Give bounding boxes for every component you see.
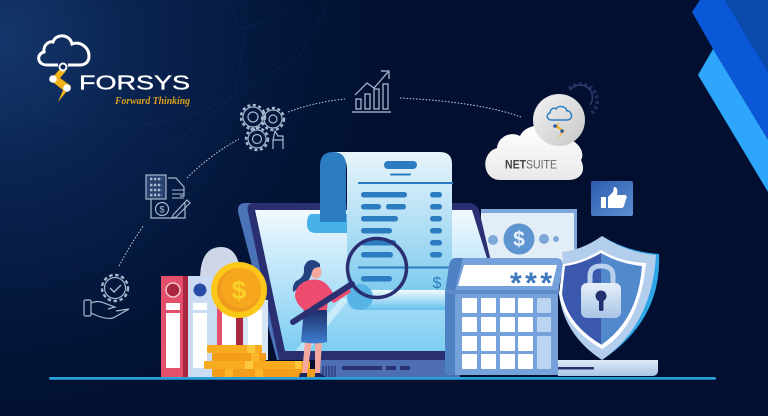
gold coin xyxy=(211,262,267,318)
receipt lines xyxy=(358,161,453,282)
receipt roll xyxy=(320,152,346,222)
receipt paper xyxy=(330,152,452,291)
receipt slot xyxy=(307,214,352,233)
laptop front edge xyxy=(558,360,658,376)
magnifying glass xyxy=(293,238,406,322)
laptop lid xyxy=(238,203,500,360)
hair xyxy=(293,260,320,292)
ground line xyxy=(49,377,716,380)
icon: bar chart trend xyxy=(352,71,391,112)
icon: hand with gear xyxy=(84,275,129,318)
laptop xyxy=(238,203,500,377)
hand xyxy=(308,307,314,313)
icon: calculator and document: $ xyxy=(159,204,165,214)
laptop screen xyxy=(255,210,500,351)
third and fourth binders xyxy=(217,300,268,360)
legs xyxy=(302,341,322,374)
logo wordmark: FORSYS xyxy=(79,72,190,94)
icon: calculator and document xyxy=(146,175,190,218)
receipt xyxy=(307,152,453,310)
red binder xyxy=(161,276,188,377)
top xyxy=(295,280,351,313)
netsuite cloud xyxy=(485,94,585,180)
forsys badge xyxy=(533,94,585,146)
coin stack xyxy=(204,345,315,377)
banknote: $ xyxy=(513,228,525,251)
thumbs up badge xyxy=(591,181,633,216)
faint gear xyxy=(569,84,597,113)
gold coin: $ xyxy=(232,275,247,305)
binders xyxy=(161,247,268,377)
woman figure xyxy=(293,260,351,377)
netsuite label: NETSUITE xyxy=(505,160,557,172)
banknote xyxy=(481,209,577,269)
calculator xyxy=(445,258,563,375)
security shield xyxy=(559,236,659,360)
blue binder xyxy=(188,276,217,377)
binder back tab xyxy=(200,247,241,280)
calculator asterisks: *** xyxy=(510,267,552,300)
logo tagline: Forward Thinking xyxy=(114,96,190,107)
calculator display xyxy=(458,265,557,286)
corner stripes xyxy=(692,0,768,192)
skirt xyxy=(301,308,327,344)
receipt bottom curl xyxy=(347,290,445,310)
calculator keys xyxy=(462,298,551,369)
icon: gears xyxy=(241,105,284,150)
face xyxy=(310,266,322,278)
padlock xyxy=(581,266,621,318)
dotted arc path xyxy=(119,98,521,266)
logo xyxy=(39,36,190,107)
receipt dollar sign: $ xyxy=(433,275,442,292)
laptop base xyxy=(318,360,460,377)
logo cloud icon xyxy=(39,36,89,102)
